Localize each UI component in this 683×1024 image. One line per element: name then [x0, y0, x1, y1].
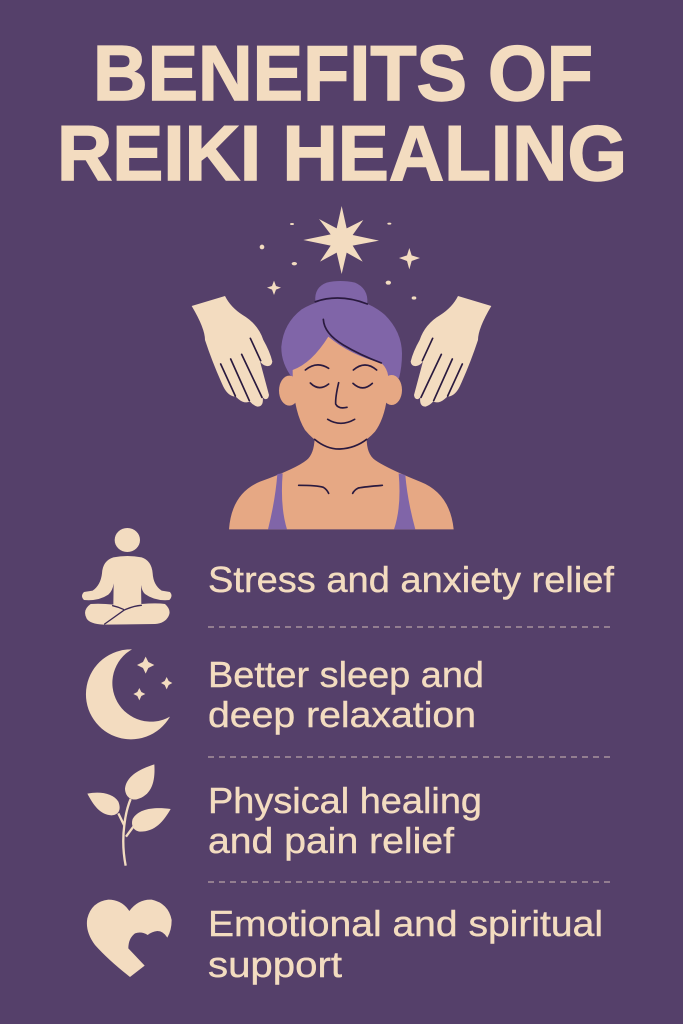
title: REIKI HEALING — [57, 109, 627, 197]
icon: meditating figure — [82, 528, 172, 625]
label: support — [208, 944, 342, 985]
list row 3: physical healing — [87, 764, 482, 866]
left hand — [192, 296, 272, 407]
label: Better sleep and — [208, 654, 484, 695]
title — [57, 29, 627, 197]
label — [208, 780, 482, 861]
hair bun — [315, 281, 367, 303]
ears — [279, 375, 402, 406]
label: Physical healing — [208, 780, 482, 821]
label: and pain relief — [208, 820, 455, 861]
list row 1: stress and anxiety relief — [82, 528, 615, 625]
icon: large star — [303, 206, 379, 274]
illustration: reiki healing session — [192, 206, 491, 529]
list row 2: better sleep — [86, 649, 484, 739]
face — [293, 337, 388, 449]
title: BENEFITS OF — [93, 29, 593, 117]
top straps — [268, 473, 415, 529]
list row 4: emotional and spiritual support — [87, 900, 603, 985]
icon: heart — [87, 900, 172, 977]
sparkles — [260, 223, 420, 300]
right hand — [411, 296, 491, 407]
face line art — [299, 298, 382, 493]
shoulders and neck — [229, 438, 454, 529]
icon: crescent moon and stars — [86, 649, 172, 739]
hair — [281, 298, 402, 378]
label: Emotional and spiritual — [208, 903, 603, 944]
icon: sprout with leaves — [87, 764, 171, 866]
label: Stress and anxiety relief — [208, 559, 615, 600]
label: deep relaxation — [208, 694, 476, 735]
label — [208, 903, 603, 985]
label — [208, 654, 484, 735]
